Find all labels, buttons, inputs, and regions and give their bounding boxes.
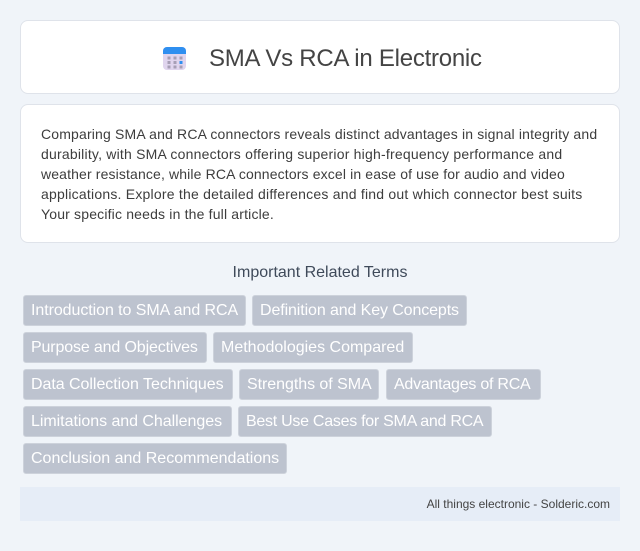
tag	[252, 295, 467, 326]
tag: Definition and Key Concepts	[260, 302, 459, 319]
related terms tags	[23, 295, 541, 474]
tag: Strengths of SMA	[247, 376, 372, 393]
tag: Methodologies Compared	[221, 339, 404, 356]
tag: Data Collection Techniques	[31, 376, 224, 393]
footer	[20, 487, 620, 521]
footer: All things electronic - Solderic.com	[427, 497, 610, 511]
intro text: durability, with SMA connectors offering superior high-frequency performance and	[41, 146, 562, 162]
tag	[213, 332, 413, 363]
intro text: weather resistance, while RCA connectors excel in ease of use for audio and video	[41, 166, 565, 182]
tag	[386, 369, 541, 400]
tag	[238, 406, 492, 437]
intro text: Comparing SMA and RCA connectors reveals distinct advantages in signal integrity and	[41, 126, 597, 142]
tag: Best Use Cases for SMA and RCA	[246, 413, 483, 430]
intro text: Your specific needs in the full article.	[41, 206, 274, 222]
intro text	[41, 126, 597, 222]
tag	[23, 369, 233, 400]
tag: Conclusion and Recommendations	[31, 450, 279, 467]
tag	[23, 406, 232, 437]
intro text: applications. Explore the detailed differences and find out which connector best suits	[41, 186, 582, 202]
tag	[23, 332, 207, 363]
tag: Introduction to SMA and RCA	[31, 302, 238, 319]
tag	[239, 369, 379, 400]
tag: Advantages of RCA	[394, 376, 530, 393]
tag: Limitations and Challenges	[31, 413, 222, 430]
tag: Purpose and Objectives	[31, 339, 198, 356]
icon: calendar	[163, 47, 186, 70]
tag	[23, 443, 287, 474]
title card	[20, 20, 620, 94]
tag	[23, 295, 246, 326]
section heading: Important Related Terms	[233, 264, 407, 281]
intro panel	[20, 104, 620, 243]
title: SMA Vs RCA in Electronic	[209, 45, 482, 72]
